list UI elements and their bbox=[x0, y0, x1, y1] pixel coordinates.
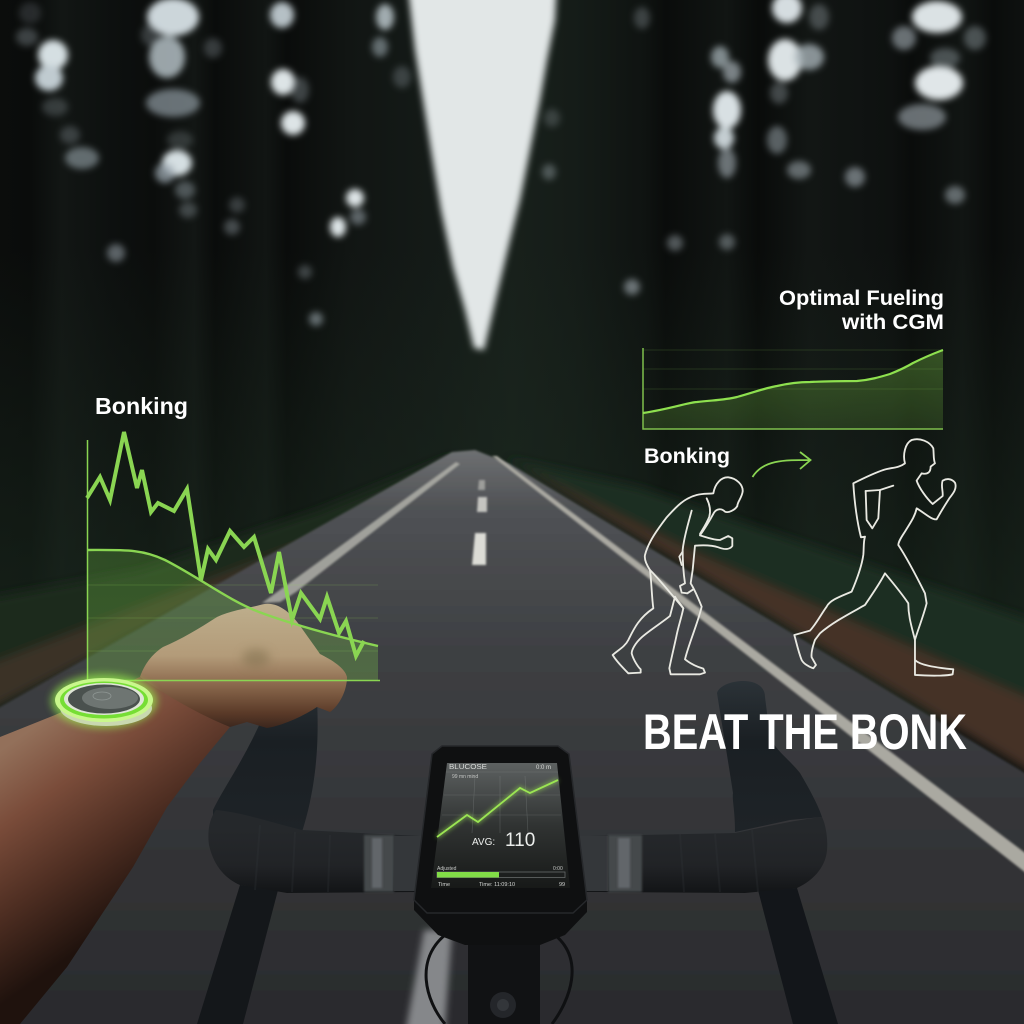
lower road dash bbox=[404, 930, 452, 1024]
rider hand on the hood bbox=[140, 604, 347, 728]
left chart: fill and grid behind hand bbox=[87, 550, 378, 680]
stem and cables bbox=[426, 930, 572, 1024]
heading: Optimal Fueling with CGM: with CGM bbox=[841, 311, 944, 334]
computer chart bbox=[437, 772, 561, 837]
roadside verges bbox=[0, 456, 1024, 780]
bike computer: 99 bbox=[559, 882, 565, 888]
handlebar right side bbox=[580, 681, 827, 893]
bike computer: 0:0 m bbox=[536, 765, 551, 771]
arrow: bonking to fueled bbox=[752, 452, 810, 477]
bike computer: 99 mn mind bbox=[452, 774, 478, 780]
forest background bbox=[0, 0, 1024, 720]
progress bar: 0:00 bbox=[553, 866, 563, 872]
heading: Bonking (left): Bonking bbox=[95, 393, 188, 419]
handlebar right drop bbox=[758, 888, 838, 1024]
CGM sensor on wrist bbox=[51, 674, 157, 728]
computer screen bbox=[431, 763, 570, 888]
road surface bbox=[0, 450, 1024, 1024]
average reading bbox=[472, 830, 535, 851]
rider forearm bbox=[0, 677, 230, 1024]
progress bar: Adjusted bbox=[437, 866, 457, 872]
heading: Optimal Fueling with CGM: Optimal Fueling bbox=[779, 287, 944, 310]
average reading: 110 bbox=[505, 830, 535, 851]
bike computer bbox=[414, 746, 587, 945]
heading: Bonking (right): Bonking bbox=[644, 444, 730, 468]
light spots between the trees, left bbox=[16, 0, 411, 326]
light spots between the trees, right bbox=[542, 0, 986, 295]
average reading: AVG: bbox=[472, 837, 495, 848]
icon: bonking figure outline bbox=[613, 477, 743, 674]
progress bar bbox=[437, 866, 565, 878]
left chart axes and lines bbox=[87, 432, 380, 680]
computer header text: BLUCOSE bbox=[449, 764, 487, 771]
handlebar left side bbox=[208, 700, 422, 893]
road lane markings bbox=[262, 456, 1024, 884]
sky gap between the trees bbox=[407, 0, 557, 350]
icon: runner figure outline bbox=[794, 439, 956, 676]
handlebar left drop bbox=[197, 885, 278, 1024]
computer footer text: Time bbox=[438, 882, 450, 888]
heading: Optimal Fueling with CGM bbox=[779, 287, 944, 334]
bike computer: Time: 11:09:10 bbox=[479, 882, 515, 888]
right chart: optimal fueling bbox=[643, 348, 943, 429]
